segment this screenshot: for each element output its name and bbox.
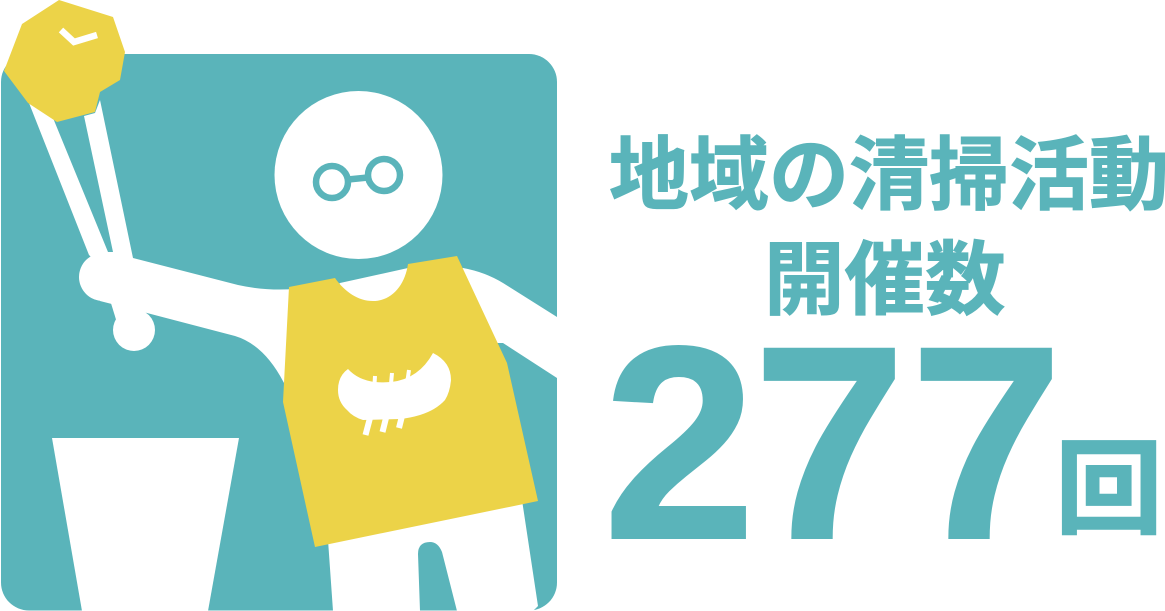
icon: trash bin <box>52 438 239 611</box>
icon: clock hands <box>61 30 97 42</box>
unit label: 回 <box>1055 433 1163 547</box>
icon: yellow clock-shaped litter <box>4 0 125 122</box>
icon: person's legs <box>328 500 538 611</box>
number: 277: 277 <box>603 290 1063 597</box>
icon: glasses <box>316 159 400 198</box>
icon: person's right arm and neck <box>320 268 557 378</box>
icon: yellow vest <box>283 256 538 547</box>
icon: canoe logo on vest <box>338 353 451 435</box>
icon: person's raised arm and hand <box>79 253 295 390</box>
panel: teal illustration background <box>1 54 557 610</box>
heading: line 2: 開催数 <box>764 236 1006 326</box>
icon: litter tongs <box>29 96 133 280</box>
heading: line 1: 地域の清掃活動 <box>609 131 1165 220</box>
icon: person's head with glasses <box>274 91 442 259</box>
